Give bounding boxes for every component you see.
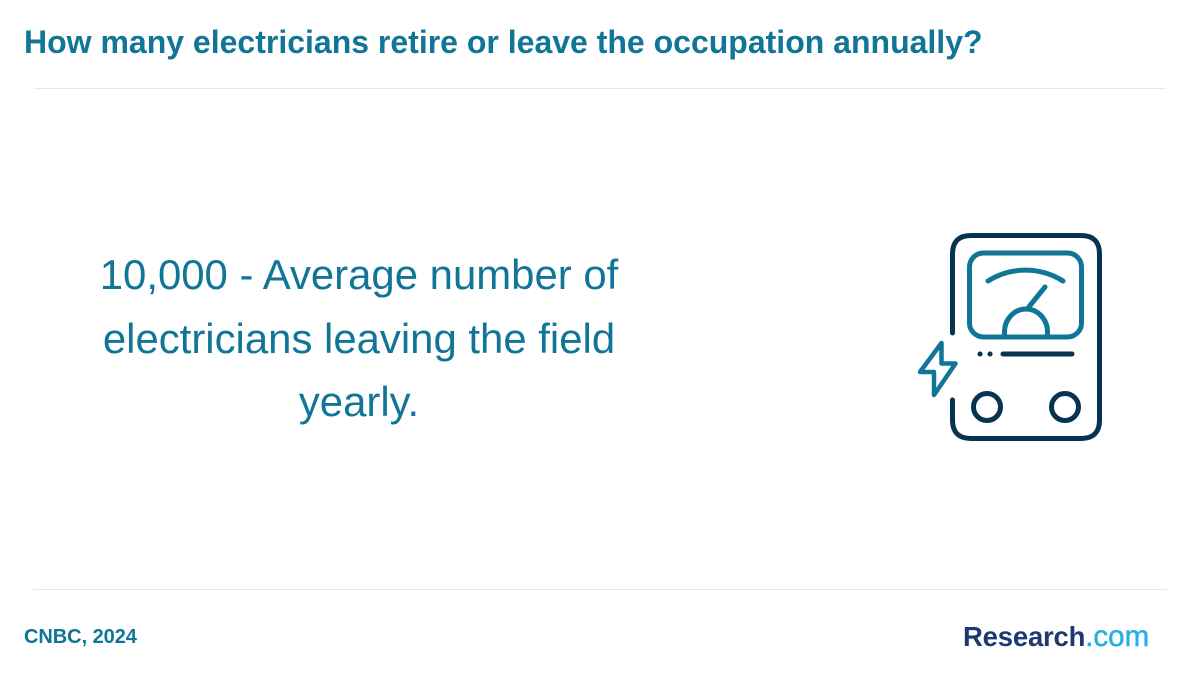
main statement: 10,000 - Average number of <box>100 251 618 298</box>
main statement: electricians leaving the field <box>103 314 615 362</box>
meter body <box>952 236 1100 438</box>
main statement: yearly. <box>299 378 419 425</box>
dials <box>974 394 1078 420</box>
source: CNBC, 2024 <box>24 626 137 648</box>
icon: lightning bolt <box>920 343 956 395</box>
logo: Research.com: Research.com <box>963 620 1149 653</box>
gauge display <box>970 253 1082 337</box>
title: How many electricians retire or leave the occupation annually? <box>24 24 983 60</box>
icon: electrical meter with lightning bolt <box>918 233 1102 441</box>
main statement <box>100 251 618 425</box>
indicator dots and line <box>980 352 1072 356</box>
